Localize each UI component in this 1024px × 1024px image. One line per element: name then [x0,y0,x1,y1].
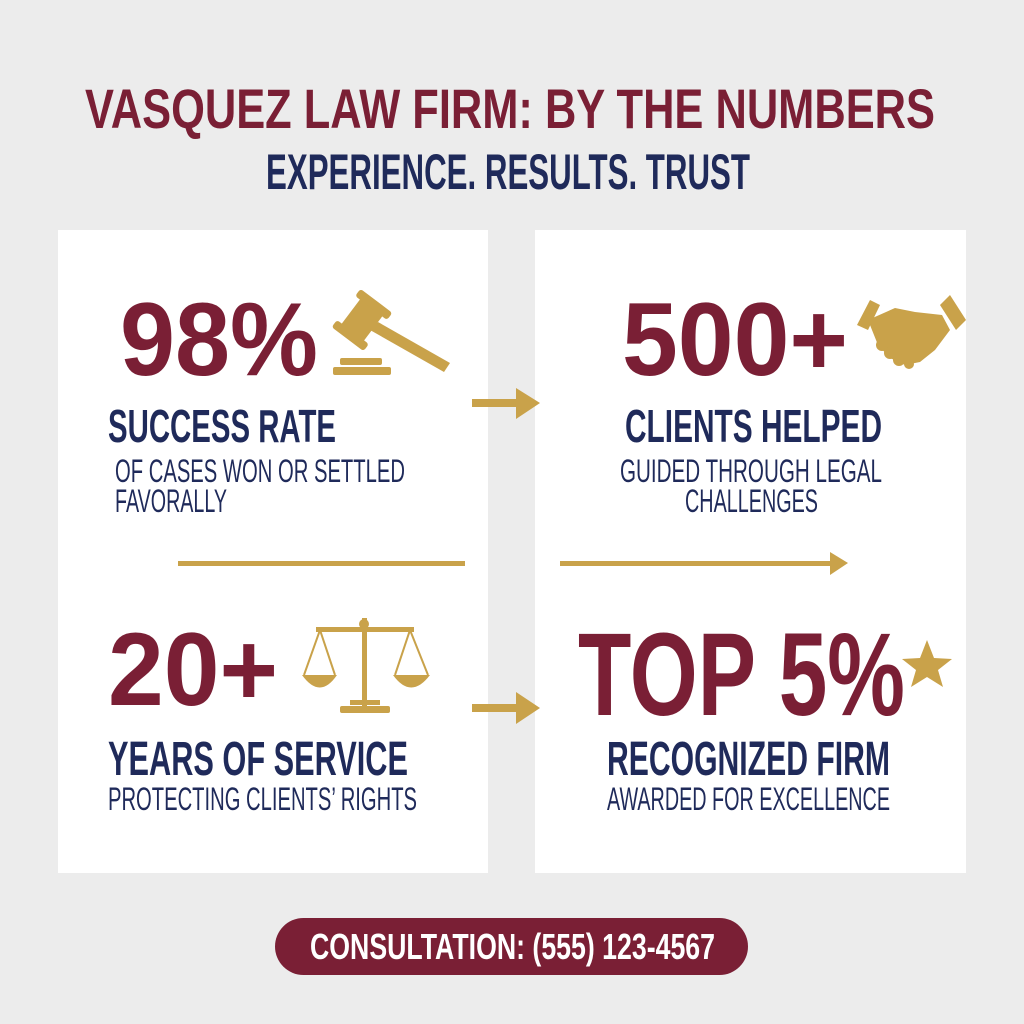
arrow: top [472,388,540,419]
stat: 500+ [620,282,882,519]
icon: star [902,640,952,687]
icon: gavel [332,289,450,375]
stat: 98%: OF CASES WON OR SETTLED [115,453,405,489]
stat: 20+: YEARS OF SERVICE [108,733,408,786]
stat: top 5% [578,609,905,817]
panel: right [535,230,966,873]
icon: scales [302,618,430,713]
icon: handshake [857,295,966,369]
stat: 500+: 500+ [622,282,848,398]
stat: 98%: 98% [120,282,318,398]
stat: 500+: CHALLENGES [685,483,818,519]
stat: 98%: SUCCESS RATE [108,400,336,452]
subtitle: EXPERIENCE. RESULTS. TRUST [266,144,750,200]
button: consultation [275,918,748,975]
divider lines [178,552,848,575]
stat: 20+: 20+ [108,612,278,728]
stat: 500+: CLIENTS HELPED [625,400,882,452]
stat: 20+ [108,612,417,817]
stat: 98% [108,282,405,519]
stat: 20+: PROTECTING CLIENTS’ RIGHTS [108,781,417,817]
stat: 500+: GUIDED THROUGH LEGAL [620,453,882,489]
stat: top 5%: TOP 5% [578,609,905,741]
arrow: bottom [472,692,540,724]
button: consultation: CONSULTATION: (555) 123-4567 [310,926,715,967]
panel: left [58,230,488,873]
stat: 98%: FAVORALLY [115,483,227,519]
